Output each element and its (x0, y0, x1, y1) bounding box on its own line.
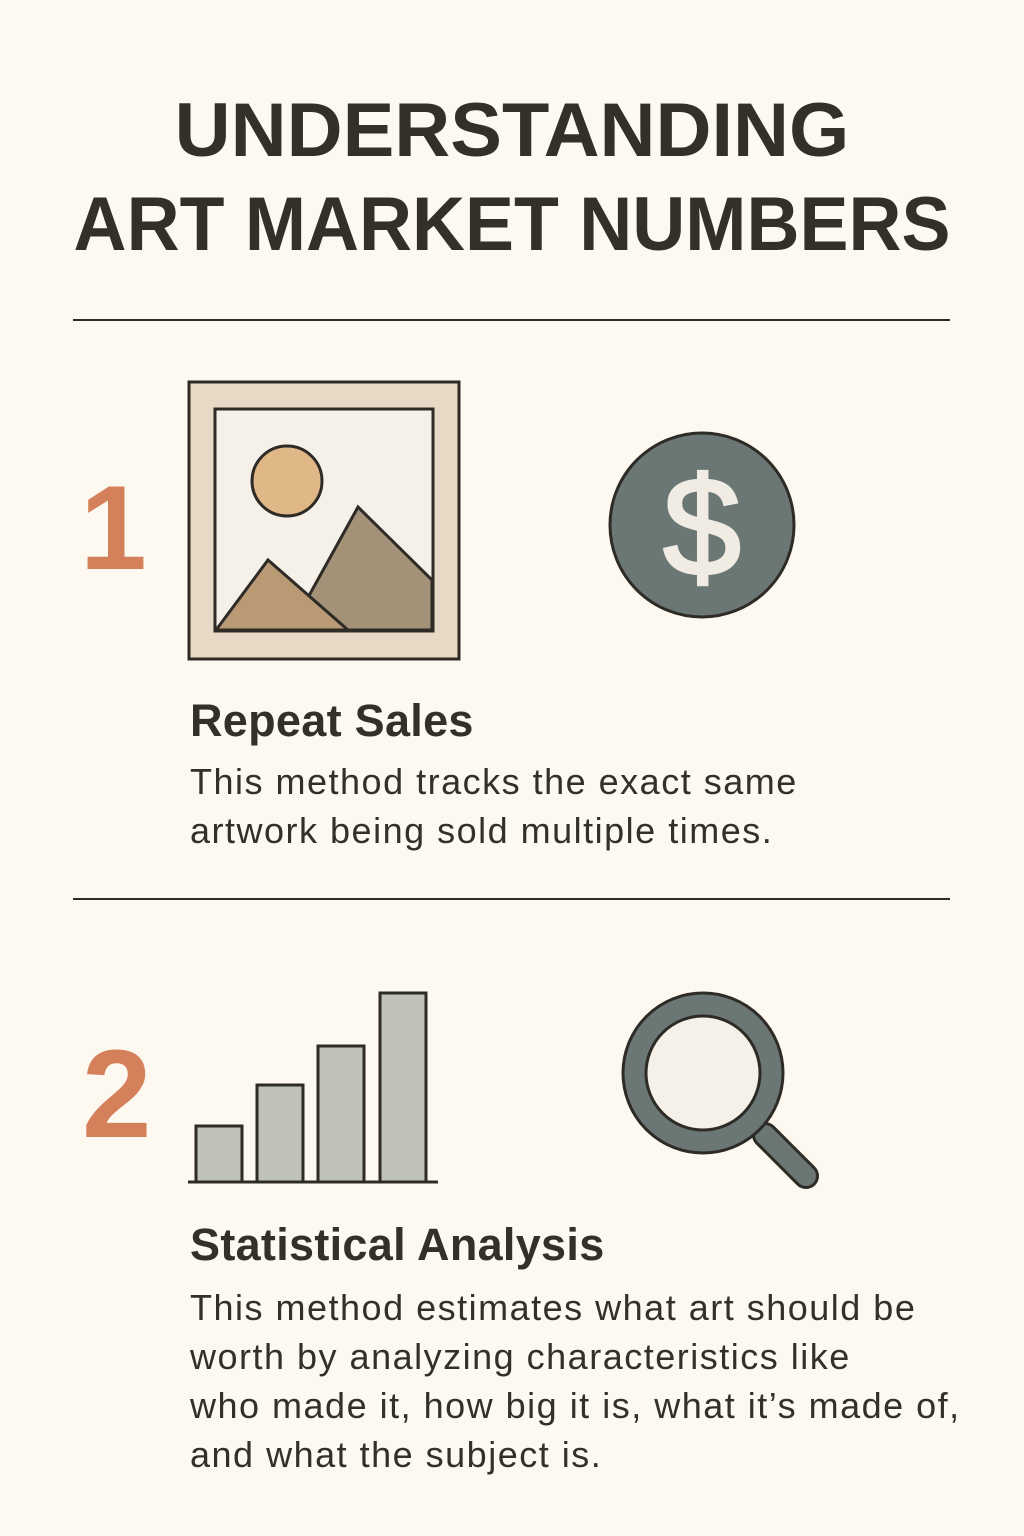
text: statistical analysis description: This method estimates what art should be (190, 1287, 916, 1328)
heading: statistical analysis: Statistical Analysis (190, 1219, 605, 1270)
number 2: 2 (82, 1025, 152, 1164)
text: statistical analysis description: and what the subject is. (190, 1434, 602, 1475)
title: ART MARKET NUMBERS (74, 182, 950, 267)
icon: bar chart (188, 992, 438, 1184)
number 1: 1 (80, 461, 147, 595)
title (74, 88, 950, 267)
text: statistical analysis description: who made it, how big it is, what it’s made of, (190, 1385, 961, 1426)
icon: dollar coin (608, 432, 796, 618)
text: repeat sales description: This method tracks the exact same (190, 761, 798, 802)
text: statistical analysis description (190, 1287, 961, 1475)
heading: repeat sales: Repeat Sales (190, 695, 474, 746)
icon: framed picture (188, 380, 460, 660)
panel: statistical analysis (82, 992, 961, 1475)
title: UNDERSTANDING (175, 88, 849, 173)
text: repeat sales description: artwork being sold multiple times. (190, 810, 773, 851)
text: statistical analysis description: worth by analyzing characteristics like (190, 1336, 851, 1377)
icon: magnifying glass (622, 992, 819, 1189)
text: repeat sales description (190, 761, 798, 851)
icon: dollar coin: $ (663, 448, 741, 605)
panel: repeat sales (80, 380, 798, 851)
